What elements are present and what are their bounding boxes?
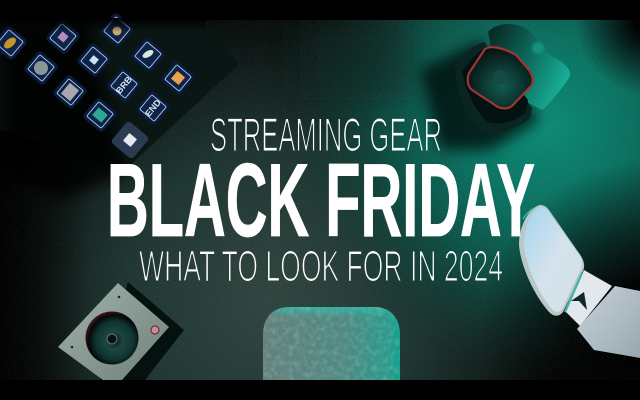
key label: BRB: BRB <box>114 74 134 96</box>
icon: webcam with red ring, top right <box>420 24 570 150</box>
stream deck keys <box>0 12 196 133</box>
title: streaming gear: STREAMING GEAR <box>210 108 442 161</box>
key label: END: END <box>143 97 163 118</box>
icon: stream deck controller <box>0 12 239 200</box>
icon: action camera, bottom left <box>58 282 184 380</box>
icon: white wireless microphone clip <box>519 205 640 358</box>
icon: teal foam microphone windscreen <box>263 307 400 380</box>
